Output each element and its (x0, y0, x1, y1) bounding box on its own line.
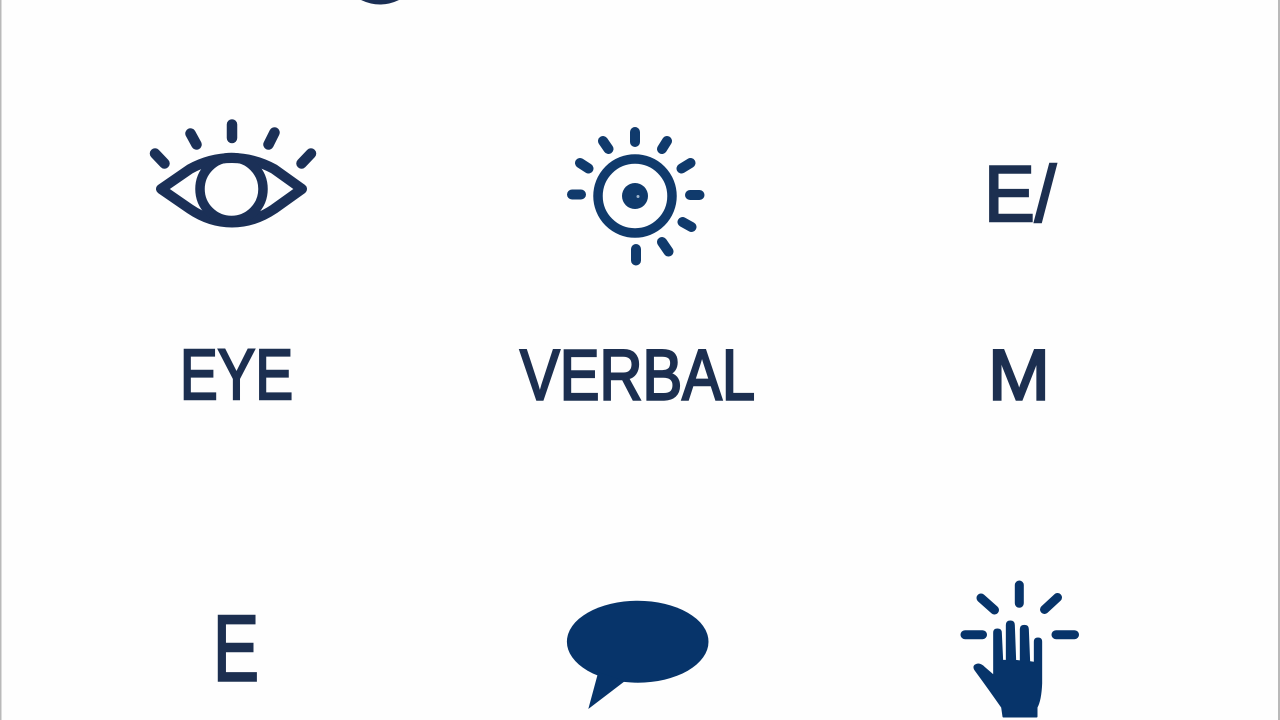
icon: speech bubble (567, 601, 708, 709)
label: M: M (988, 336, 1050, 416)
label: VERBAL: VERBAL (520, 336, 755, 416)
label: E/: E/ (984, 149, 1056, 238)
label: EYE: EYE (180, 336, 293, 415)
label: E: E (213, 596, 259, 700)
heading fragment: cropped descender (361, 0, 399, 4)
icon: eye with lashes (155, 124, 311, 222)
icon: raised hand with rays (965, 585, 1074, 717)
icon: sun-like circle with rays (572, 132, 700, 260)
